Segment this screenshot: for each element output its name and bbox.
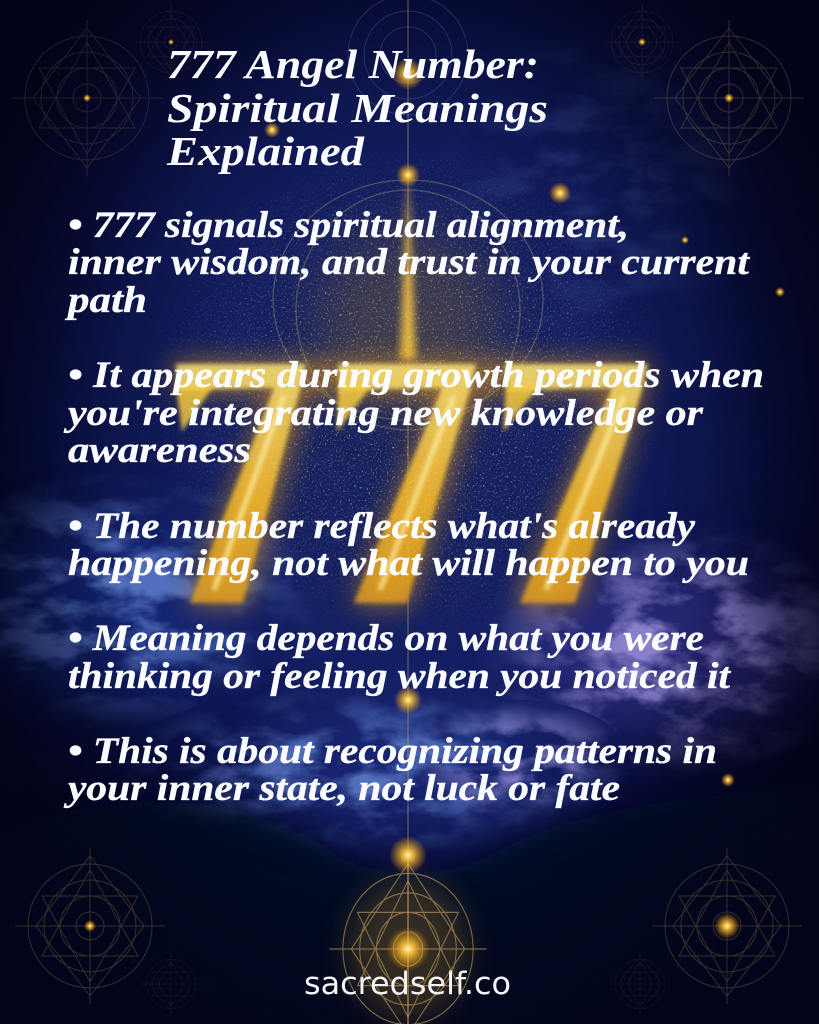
bullet: spiritual alignment: path — [65, 280, 147, 321]
central glow behind numerals — [318, 0, 498, 1024]
bullet: recognizing patterns: your inner state, not luck or fate — [64, 768, 620, 809]
gold dust — [130, 150, 690, 640]
bullet: meaning depends: • Meaning depends on what you were — [68, 618, 704, 659]
bullet: growth periods: you're integrating new knowledge or — [63, 393, 704, 434]
dark lower cloud — [0, 780, 819, 1024]
bullet: spiritual alignment: • 777 signals spiritual alignment, — [68, 205, 629, 246]
title: Explained — [166, 128, 365, 174]
website footer: sacredself.co — [304, 966, 511, 1002]
bullet: meaning depends: thinking or feeling when you noticed it — [68, 656, 732, 697]
bullet: recognizing patterns: • This is about recognizing patterns in — [68, 731, 717, 772]
bullet: recognizing patterns — [64, 731, 717, 809]
sacred geometry: bottom centre — [329, 854, 487, 1024]
bullet: reflects what is happening: happening, not what will happen to you — [68, 543, 749, 584]
sacred geometry: top left — [12, 20, 162, 176]
bullet: reflects what is happening: • The number reflects what's already — [68, 506, 696, 547]
bullet: spiritual alignment — [65, 205, 751, 321]
title — [166, 41, 548, 174]
title: Spiritual Meanings — [167, 85, 548, 131]
sacred geometry: bottom left — [15, 848, 165, 1004]
sacred geometry: top right — [654, 20, 804, 176]
bullet: growth periods: awareness — [68, 430, 251, 471]
bullet: reflects what is happening — [68, 506, 749, 584]
bullet: growth periods — [63, 355, 764, 471]
title: 777 Angel Number: — [167, 41, 539, 87]
big glowing 777 — [172, 362, 650, 605]
sacred geometry: small upper and lower medallions — [134, 3, 680, 1015]
top centre rings — [348, 0, 468, 115]
sacred geometry: bottom right — [652, 848, 802, 1004]
bullet: spiritual alignment: inner wisdom, and trust in your current — [68, 242, 751, 283]
glowing star points — [83, 38, 785, 971]
bullet: meaning depends — [68, 618, 732, 697]
bullet: growth periods: • It appears during growth periods when — [68, 355, 764, 396]
arcs above the numerals — [273, 180, 543, 430]
